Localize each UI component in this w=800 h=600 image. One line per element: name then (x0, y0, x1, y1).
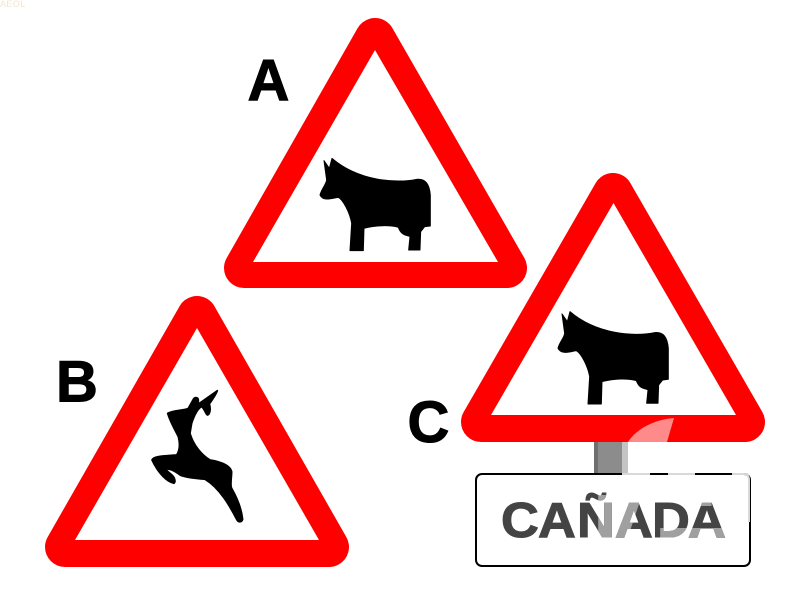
plate text: CAÑADA (501, 493, 726, 548)
plate border faded section (622, 474, 749, 522)
label B: B (56, 350, 98, 414)
sign A white field (253, 50, 498, 262)
plate border (476, 474, 750, 566)
label A: A (248, 48, 289, 114)
label C: C (408, 390, 449, 455)
sign post (594, 442, 628, 474)
icon: cow A (320, 158, 430, 251)
sign C white field (491, 203, 736, 415)
faded highlight on frame (628, 418, 674, 442)
sign B: wild animal warning triangle (65, 316, 329, 547)
sign B white field (75, 328, 319, 540)
icon: leaping deer (152, 391, 243, 522)
sign C frame (481, 193, 745, 422)
sign C: cattle warning triangle (481, 193, 745, 442)
sign A: cattle warning triangle (244, 38, 507, 268)
sign A frame (244, 38, 507, 268)
sign B frame (65, 316, 329, 547)
plate: CAÑADA (476, 474, 750, 566)
plate text faded part: CAÑADA (501, 493, 726, 548)
icon: cow C (558, 312, 668, 404)
